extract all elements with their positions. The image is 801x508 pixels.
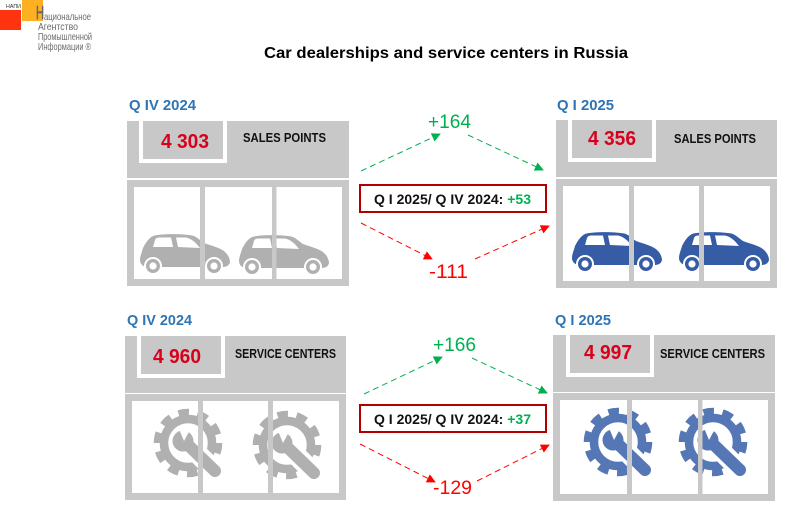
panel: service centers Q IV 2024: Q IV 2024 <box>127 312 193 329</box>
title: Car dealerships and service centers in Russia <box>264 45 628 62</box>
comparison: service centers: -129 <box>433 478 472 499</box>
comparison: sales points: -111 <box>429 262 468 283</box>
comparison: sales points <box>360 112 549 283</box>
comparison: service centers <box>360 335 549 499</box>
panel: sales points Q IV 2024: 4 303 <box>161 131 209 153</box>
panel: sales points Q IV 2024 <box>127 97 349 286</box>
panel: service centers Q I 2025 <box>553 312 775 501</box>
logo: Информации ® <box>38 41 91 53</box>
panel: sales points Q I 2025: Q I 2025 <box>557 97 614 114</box>
panel: sales points Q I 2025: 4 356 <box>588 128 636 150</box>
panel: sales points Q I 2025 <box>556 97 777 288</box>
panel: service centers Q I 2025: SERVICE CENTERS <box>660 346 765 361</box>
logo: ациональное <box>44 11 91 23</box>
comparison: sales points: +164 <box>428 112 471 133</box>
logo: НАПИ <box>6 4 21 10</box>
comparison: sales points: Q I 2025/ Q IV 2024: +53 <box>374 192 532 207</box>
panel: service centers Q I 2025: Q I 2025 <box>555 312 611 329</box>
panel: service centers Q IV 2024 <box>125 312 346 500</box>
logo: Агентство <box>38 21 78 33</box>
comparison: service centers: Q I 2025/ Q IV 2024: +37 <box>374 412 531 427</box>
logo: Н <box>36 3 44 23</box>
panel: service centers Q IV 2024: 4 960 <box>153 346 201 368</box>
logo: Промышленной <box>38 31 92 43</box>
comparison: service centers: +166 <box>433 335 476 356</box>
panel: service centers Q I 2025: 4 997 <box>584 342 632 364</box>
logo <box>0 0 92 53</box>
panel: service centers Q IV 2024: SERVICE CENTERS <box>235 346 336 361</box>
panel: sales points Q I 2025: SALES POINTS <box>674 131 756 146</box>
panel: sales points Q IV 2024: Q IV 2024 <box>129 97 197 114</box>
panel: sales points Q IV 2024: SALES POINTS <box>243 130 326 145</box>
